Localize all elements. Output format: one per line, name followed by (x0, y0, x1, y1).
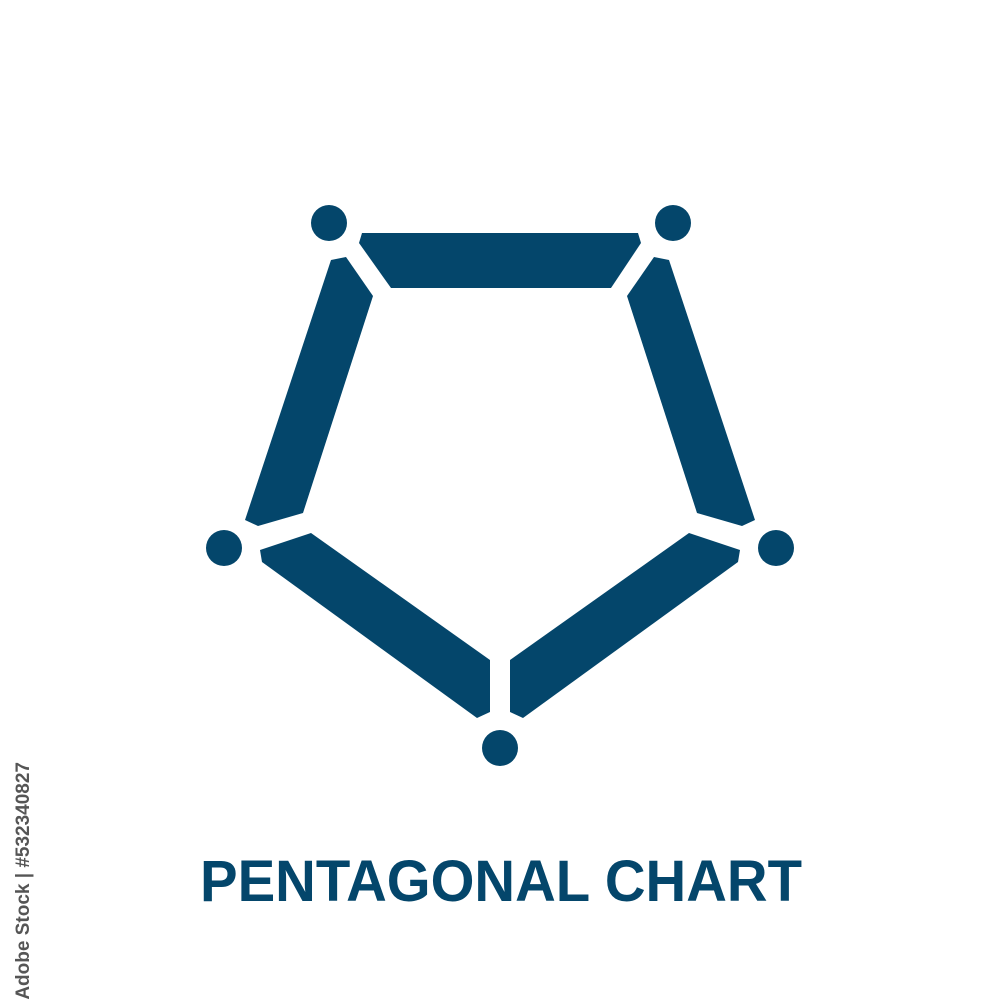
node dots (206, 205, 794, 766)
right lower bar (510, 533, 740, 718)
right upper bar (627, 257, 755, 526)
title: PENTAGONAL CHART (200, 849, 802, 914)
side stock id text: Adobe Stock | #532340827 (13, 762, 34, 1000)
left lower bar (260, 533, 490, 718)
top bar (359, 233, 641, 288)
icon: pentagonal chart (206, 205, 794, 766)
left upper bar (245, 257, 373, 526)
